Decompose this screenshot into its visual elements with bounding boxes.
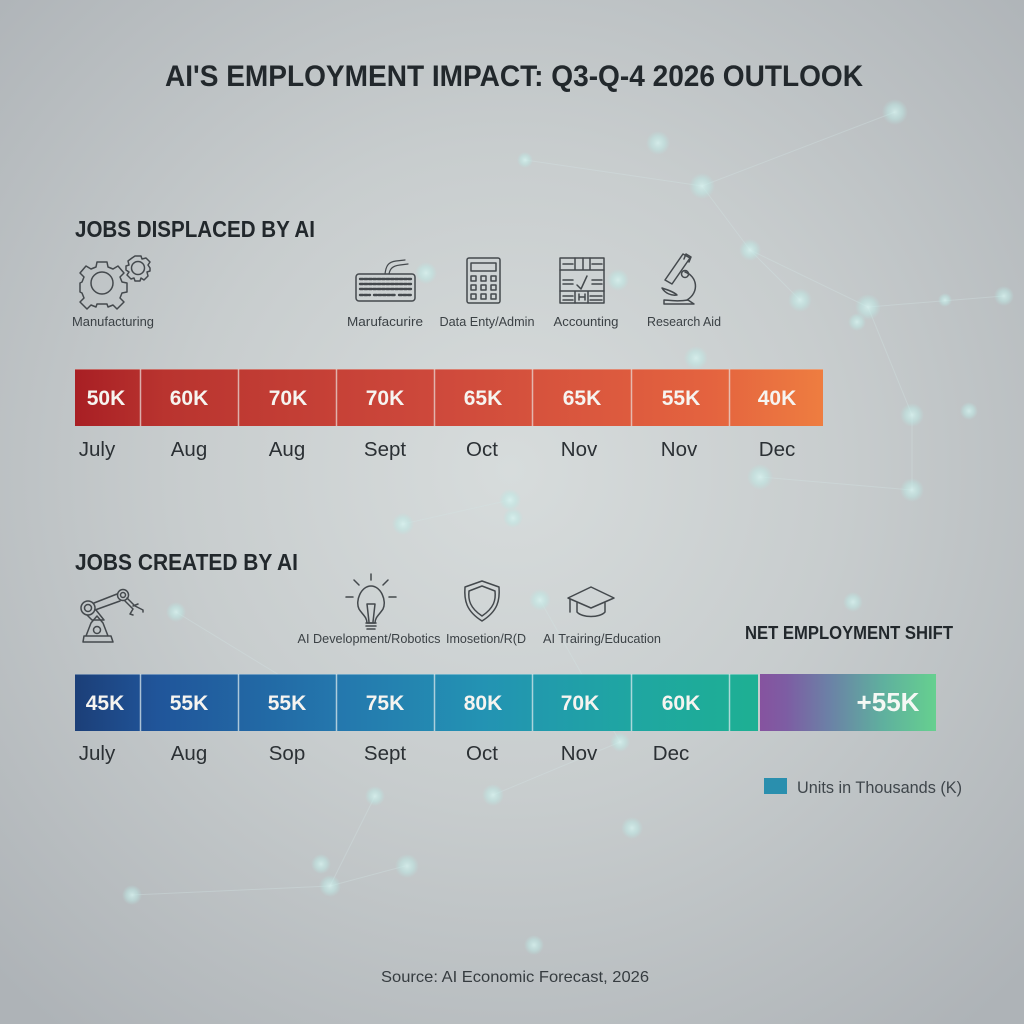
icon: lightbulb (346, 574, 396, 629)
month labels: displaced (79, 438, 795, 461)
month labels: created: Oct (466, 742, 498, 765)
label: AI training: AI Trairing/Education (543, 632, 661, 646)
month labels: created (79, 742, 689, 765)
label: accounting: Accounting (554, 315, 619, 329)
month labels: created: Sop (269, 742, 305, 765)
bar: displaced by month: 65K (464, 387, 502, 410)
bar: displaced by month: 60K (170, 387, 208, 410)
panel: jobs created by AI (75, 549, 758, 765)
month labels: displaced: Dec (759, 438, 795, 461)
month labels: created: Aug (171, 742, 207, 765)
month labels: created: July (79, 742, 116, 765)
bar: created by month (75, 674, 758, 731)
month labels: created: Nov (561, 742, 598, 765)
legend label: Units in Thousands (K) (797, 779, 962, 797)
title: AI'S EMPLOYMENT IMPACT: Q3-Q-4 2026 OUTLOOK (165, 60, 863, 93)
heading: jobs created: JOBS CREATED BY AI (75, 549, 298, 575)
bar: net shift (760, 674, 936, 731)
icon: calculator (467, 258, 500, 303)
icon: gears (80, 256, 150, 309)
legend swatch (764, 778, 787, 794)
panel: jobs displaced by AI (72, 216, 823, 461)
month labels: displaced: Aug (171, 438, 207, 461)
month labels: created: Sept (364, 742, 406, 765)
bar: displaced by month: 70K (366, 387, 404, 410)
bar: displaced by month: 40K (758, 387, 796, 410)
heading: jobs displaced: JOBS DISPLACED BY AI (75, 216, 315, 242)
value: net shift: +55K (857, 687, 920, 717)
legend (764, 778, 962, 797)
month labels: displaced: Oct (466, 438, 498, 461)
month labels: created: Dec (653, 742, 689, 765)
panel: net employment shift (745, 623, 953, 731)
icon: keyboard (356, 260, 415, 301)
bar: created by month: 80K (464, 692, 502, 715)
bar: created by month: 60K (662, 692, 700, 715)
bar: created by month: 45K (86, 692, 124, 715)
bar: displaced by month (75, 369, 823, 426)
label: marufacurire: Marufacurire (347, 315, 423, 329)
icon: microscope (662, 254, 695, 304)
icon: shield (465, 581, 499, 621)
month labels: displaced: Aug (269, 438, 305, 461)
label: data entry: Data Enty/Admin (440, 315, 535, 329)
bar: displaced by month: 65K (563, 387, 601, 410)
month labels: displaced: Nov (661, 438, 698, 461)
bar: created by month: 55K (268, 692, 306, 715)
bar: created by month: 75K (366, 692, 404, 715)
bar: created by month: 55K (170, 692, 208, 715)
icon: accounting ledger (560, 258, 604, 303)
icon: graduation cap (568, 587, 614, 616)
heading: net employment shift: NET EMPLOYMENT SHIFT (745, 623, 953, 643)
month labels: displaced: July (79, 438, 116, 461)
label: innovation: Imosetion/R(D (446, 632, 526, 646)
label: research aid: Research Aid (647, 315, 721, 329)
decorative network of glowing nodes (122, 99, 1014, 955)
month labels: displaced: Nov (561, 438, 598, 461)
source note: Source: AI Economic Forecast, 2026 (381, 969, 649, 986)
bar: displaced by month: 55K (662, 387, 700, 410)
bar: displaced by month: 50K (87, 387, 125, 410)
bar: created by month: 70K (561, 692, 599, 715)
month labels: displaced: Sept (364, 438, 406, 461)
bar: displaced by month: 70K (269, 387, 307, 410)
icon: robot arm (81, 590, 143, 642)
label: manufacturing: Manufacturing (72, 315, 154, 329)
label: AI development: AI Development/Robotics (298, 632, 440, 646)
